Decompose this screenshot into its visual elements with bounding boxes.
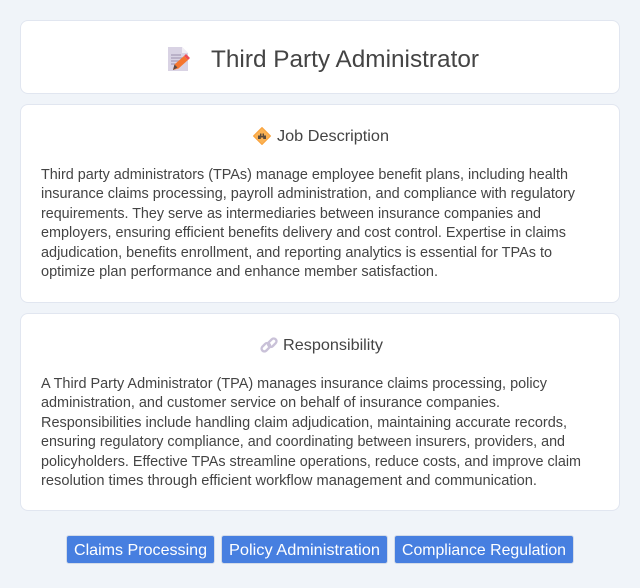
tag: compliance regulation: Compliance Regulation [402, 542, 566, 559]
text block: job description: employers, ensuring efficient benefits delivery and cost control. Expertise in claims [41, 225, 566, 241]
tag: claims processing: Claims Processing [74, 542, 207, 559]
panel: responsibility [20, 313, 620, 511]
tag: policy administration [221, 535, 388, 564]
tag: claims processing [66, 535, 215, 564]
icon: orange diamond [253, 127, 271, 145]
tag: policy administration: Policy Administration [229, 542, 380, 559]
title: Third Party Administrator [211, 46, 479, 73]
text block: responsibility [41, 376, 581, 489]
text block: job description: adjudication, benefits enrollment, and reporting analytics is essential for TPAs to [41, 245, 552, 261]
icon: document with pencil [168, 47, 190, 71]
text block: job description [41, 167, 576, 280]
text block: responsibility: A Third Party Administrator (TPA) manages insurance claims processing, policy [41, 376, 548, 392]
text block: responsibility: resolution times through efficient workflow management and communication. [41, 473, 537, 489]
heading: responsibility: Responsibility [283, 337, 383, 354]
icon: chain link [260, 337, 278, 353]
panel: job description [20, 104, 620, 303]
tag: compliance regulation [394, 535, 574, 564]
panel: title card [20, 20, 620, 94]
text block: job description: Third party administrators (TPAs) manage employee benefit plans, including health [41, 167, 568, 183]
text block: responsibility: administration, and customer service on behalf of insurance companies. [41, 395, 500, 411]
text block: job description: requirements. They serve as intermediaries between insurance companies and [41, 206, 541, 222]
heading: job description: Job Description [277, 128, 389, 145]
text block: responsibility: policyholders. Effective TPAs streamline operations, reduce costs, and improve claim [41, 454, 581, 470]
text block: job description: insurance claims processing, payroll administration, and compliance with regulatory [41, 186, 576, 202]
text block: responsibility: ensuring regulatory compliance, and coordinating between insurers, providers, and [41, 434, 565, 450]
text block: responsibility: Responsibilities include handling claim adjudication, maintaining accurate records, [41, 415, 567, 431]
text block: job description: optimize plan performance and enhance member satisfaction. [41, 264, 438, 280]
